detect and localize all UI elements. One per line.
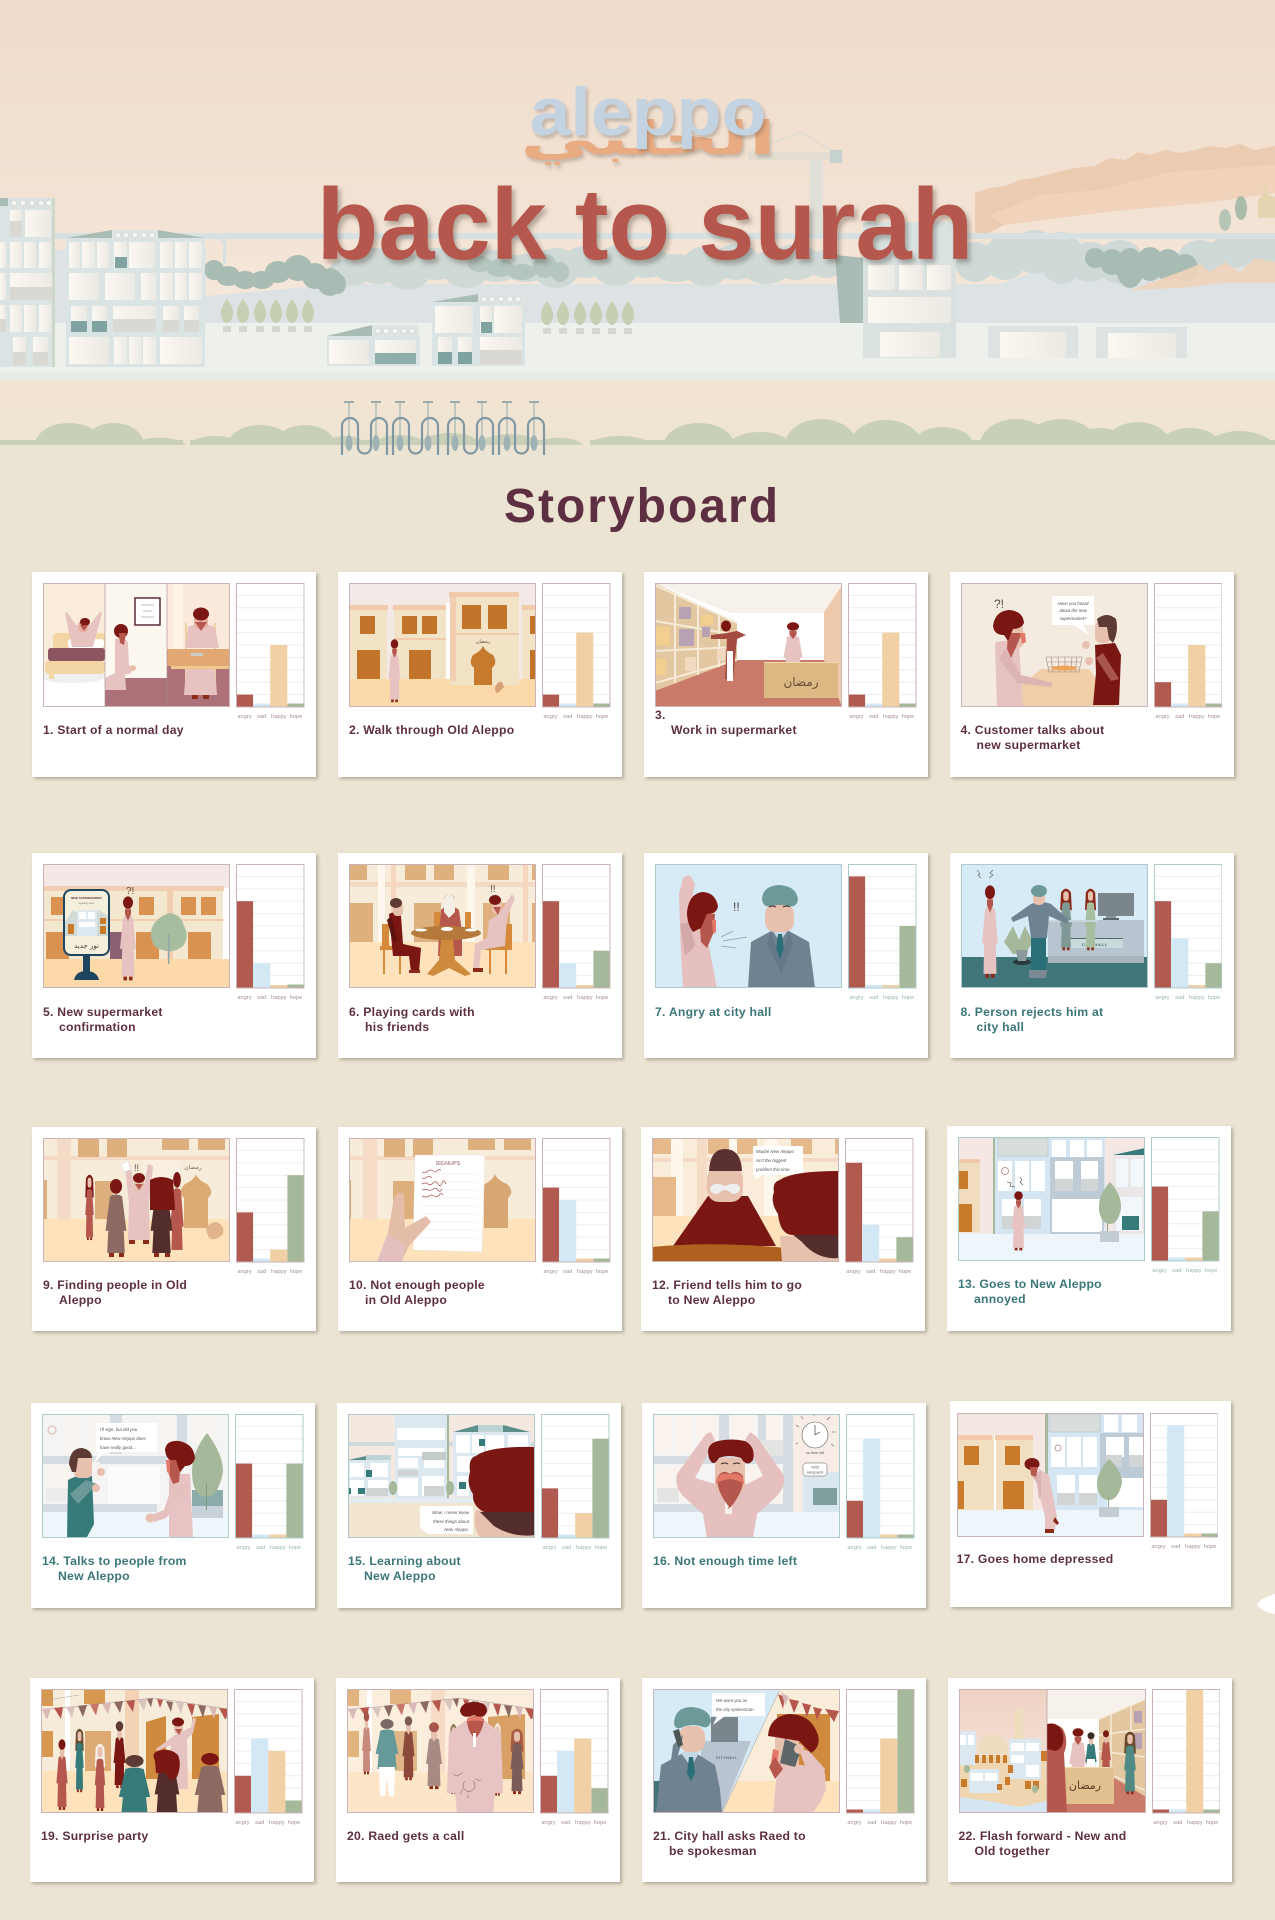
- scene 15: learning about New Aleppo: New Aleppo.: [444, 1527, 469, 1532]
- scene 2: walk through Old Aleppo: رمضان: [476, 639, 491, 645]
- scene 16: not enough time left: [653, 1414, 840, 1538]
- scene 15: learning about New Aleppo: [348, 1414, 535, 1538]
- emotion chart 5: [236, 864, 304, 1001]
- emotion chart 22: angry: [1153, 1820, 1167, 1826]
- emotion chart 14: happy: [270, 1545, 286, 1551]
- emotion chart 5: sad: [257, 995, 266, 1001]
- emotion chart 16: angry: [847, 1545, 862, 1551]
- mid-ground haze: [206, 262, 1275, 325]
- emotion chart 5: angry: [237, 995, 252, 1001]
- emotion chart 15: sad: [562, 1545, 571, 1551]
- scene 9: finding people in Old Aleppo: [43, 1138, 230, 1262]
- emotion chart 20: [540, 1689, 608, 1829]
- emotion chart 17: happy: [1185, 1544, 1200, 1550]
- emotion chart 7: sad: [869, 995, 878, 1001]
- heading: Storyboard: Storyboard: [504, 480, 780, 533]
- caption 10: 10. Not enough people: [349, 1278, 485, 1292]
- ground strip: [0, 323, 1275, 380]
- emotion chart 13: sad: [1172, 1268, 1181, 1274]
- emotion chart 14: hope: [289, 1545, 301, 1551]
- scene 4: customer talks about new supermarket: [961, 583, 1148, 707]
- panel: card 8: [950, 853, 1234, 1058]
- tree row 1: [221, 299, 314, 332]
- scene 9: finding people in Old Aleppo: رمضان: [184, 1164, 202, 1171]
- scene 20: Raed gets a call: [347, 1689, 534, 1813]
- panel: card 19: [30, 1678, 314, 1882]
- caption 9: [43, 1278, 187, 1307]
- panel: card 6: [338, 853, 622, 1058]
- emotion chart 19: angry: [235, 1820, 250, 1826]
- emotion chart 21: hope: [900, 1820, 912, 1826]
- scene 4: customer talks about new supermarket: Have you heard: [1057, 601, 1089, 606]
- emotion chart 7: angry: [849, 995, 864, 1001]
- emotion chart 9: [236, 1138, 304, 1275]
- dark forest clump left: [204, 255, 346, 296]
- caption 9: Aleppo: [59, 1293, 102, 1307]
- scene 22: flash forward, new and old together: رمضان: [1068, 1779, 1101, 1792]
- scene 7: angry at city hall: [655, 864, 842, 988]
- scene 5: new supermarket confirmation: ?!: [126, 886, 134, 897]
- emotion chart 9: hope: [290, 1269, 302, 1275]
- emotion chart 6: angry: [543, 995, 558, 1001]
- caption 12: 12. Friend tells him to go: [652, 1278, 802, 1292]
- title: back to surah: [317, 169, 973, 281]
- panel: card 9: [32, 1127, 316, 1331]
- building D: [432, 294, 525, 366]
- scene 15: learning about New Aleppo: Wow, I never knew: [432, 1510, 470, 1515]
- emotion chart 15: angry: [542, 1545, 557, 1551]
- scene 22: flash forward, new and old together: [958, 1689, 1146, 1813]
- caption 15: 15. Learning about: [348, 1554, 461, 1568]
- emotion chart 10: happy: [577, 1269, 593, 1275]
- clock icon: 43/50: [811, 1466, 819, 1470]
- crane: [748, 132, 842, 235]
- emotion chart 8: [1154, 864, 1222, 1001]
- caption 7: 7. Angry at city hall: [655, 1005, 772, 1019]
- emotion chart 7: hope: [902, 995, 914, 1001]
- caption 14: New Aleppo: [58, 1569, 130, 1583]
- panel: card 12: [641, 1127, 925, 1331]
- emotion chart 20: hope: [594, 1820, 606, 1826]
- caption 6: [349, 1005, 475, 1034]
- caption 4: [960, 723, 1104, 752]
- dark forest clump right: [1085, 247, 1198, 288]
- panel: card 14: [31, 1403, 315, 1608]
- caption 8: [960, 1005, 1103, 1034]
- emotion chart 20: angry: [541, 1820, 556, 1826]
- caption 15: New Aleppo: [364, 1569, 436, 1583]
- emotion chart 19: [234, 1689, 302, 1829]
- caption 16: 16. Not enough time left: [653, 1554, 797, 1568]
- scene 2: walk through Old Aleppo: [349, 583, 536, 707]
- emotion chart 12: hope: [899, 1269, 911, 1275]
- clock icon: no time left: [806, 1451, 825, 1455]
- panel: card 3: [644, 572, 928, 777]
- scene 13: goes to New Aleppo annoyed: [958, 1137, 1145, 1261]
- emotion chart 3: [848, 583, 916, 720]
- caption 14: [42, 1554, 187, 1583]
- caption 3: 3.: [655, 708, 666, 722]
- emotion chart 13: happy: [1186, 1268, 1202, 1274]
- panel: card 1: [32, 572, 316, 777]
- emotion chart 8: angry: [1155, 995, 1169, 1001]
- orange slope right: [1130, 258, 1275, 290]
- clock icon: autographs: [807, 1471, 824, 1475]
- scene 5: new supermarket confirmation: نور جديد: [74, 942, 99, 950]
- emotion chart 12: [845, 1138, 914, 1275]
- emotion chart 19: happy: [269, 1820, 285, 1826]
- scene 19: surprise party: [41, 1689, 228, 1813]
- emotion chart 10: [542, 1138, 610, 1275]
- caption 8: city hall: [976, 1020, 1024, 1034]
- emotion chart 3: sad: [869, 714, 878, 720]
- scene 6: playing cards with friends: !!: [490, 884, 496, 895]
- panel: card 2: [338, 572, 622, 777]
- logo: aleppo blue letters: aleppo: [530, 74, 766, 150]
- scene 21: city hall asks Raed to be spokesman: [653, 1689, 840, 1813]
- emotion chart 3: hope: [902, 714, 914, 720]
- caption 6: his friends: [365, 1020, 429, 1034]
- emotion chart 9: angry: [237, 1269, 252, 1275]
- caption 21: 21. City hall asks Raed to: [653, 1829, 806, 1843]
- scene 14: talks to people from New Aleppo: know New Aleppo does: [100, 1436, 147, 1441]
- emotion chart 1: [236, 583, 304, 720]
- scene 4: customer talks about new supermarket: supermarket?: [1059, 616, 1086, 621]
- emotion chart 21: sad: [867, 1820, 876, 1826]
- emotion chart 17: hope: [1203, 1544, 1216, 1550]
- scene 21: city hall asks Raed to be spokesman: CITYHALL: [716, 1756, 738, 1760]
- emotion chart 17: [1150, 1413, 1218, 1553]
- caption 4: 4. Customer talks about: [960, 723, 1104, 737]
- caption 3: Work in supermarket: [671, 723, 797, 737]
- caption 12: to New Aleppo: [668, 1293, 755, 1307]
- distant orange hills: [975, 144, 1275, 240]
- dark forest clump centre: [468, 254, 569, 282]
- emotion chart 10: sad: [563, 1269, 572, 1275]
- emotion chart 20: happy: [575, 1820, 591, 1826]
- emotion chart 21: [846, 1689, 914, 1829]
- emotion chart 6: sad: [563, 995, 572, 1001]
- caption 15: [348, 1554, 461, 1584]
- emotion chart 19: sad: [255, 1820, 264, 1826]
- forest mid tone: [328, 244, 844, 290]
- caption 4: new supermarket: [976, 738, 1080, 752]
- caption 5: 5. New supermarket: [43, 1005, 163, 1019]
- scene 7: angry at city hall: !!: [733, 900, 740, 914]
- caption 13: 13. Goes to New Aleppo: [958, 1277, 1102, 1291]
- emotion chart 4: [1154, 583, 1222, 720]
- emotion chart 4: sad: [1175, 714, 1184, 720]
- emotion chart 10: angry: [543, 1269, 558, 1275]
- emotion chart 1: hope: [290, 714, 302, 720]
- caption 5: [43, 1005, 163, 1034]
- building C: [327, 325, 420, 366]
- scene 6: playing cards with friends: [349, 864, 536, 988]
- old town castle on the far right: [1219, 183, 1275, 231]
- emotion chart 2: hope: [596, 714, 608, 720]
- emotion chart 17: angry: [1151, 1544, 1165, 1550]
- scene 15: learning about New Aleppo: these things about: [433, 1519, 470, 1524]
- emotion chart 3: angry: [849, 714, 864, 720]
- scene 8: person rejects him at city hall: [961, 864, 1148, 988]
- caption 8: 8. Person rejects him at: [960, 1005, 1103, 1019]
- decorative white blob at right edge: [1257, 1594, 1275, 1614]
- emotion chart 7: [848, 864, 916, 1001]
- teal tower side: [835, 255, 865, 323]
- emotion chart 14: [235, 1414, 304, 1551]
- emotion chart 15: hope: [595, 1545, 607, 1551]
- scene 17: goes home depressed: [957, 1413, 1144, 1537]
- panel: card 16: [642, 1403, 926, 1608]
- building B: [66, 230, 205, 367]
- caption 17: 17. Goes home depressed: [957, 1552, 1113, 1566]
- emotion chart 8: sad: [1175, 995, 1184, 1001]
- scene 10: not enough people in Old Aleppo: [349, 1138, 536, 1262]
- emotion chart 14: sad: [256, 1545, 265, 1551]
- caption 5: confirmation: [59, 1020, 136, 1034]
- emotion chart 14: angry: [236, 1545, 251, 1551]
- scene 3: work in supermarket: [655, 583, 842, 707]
- panel: card 4: [950, 572, 1234, 777]
- caption 1: 1. Start of a normal day: [43, 723, 184, 737]
- scene 21: city hall asks Raed to be spokesman: We want you as: [716, 1698, 748, 1703]
- caption 22: Old together: [974, 1844, 1050, 1858]
- scene 21: city hall asks Raed to be spokesman: the city spokesman.: [716, 1707, 755, 1712]
- scene 4: customer talks about new supermarket: about the new: [1059, 608, 1087, 613]
- emotion chart 22: sad: [1173, 1820, 1182, 1826]
- scene 8: person rejects him at city hall: CITYHALL: [1081, 942, 1108, 947]
- bushes: [0, 419, 1275, 445]
- emotion chart 6: happy: [577, 995, 593, 1001]
- emotion chart 8: hope: [1207, 995, 1220, 1001]
- emotion chart 9: sad: [257, 1269, 266, 1275]
- bridge: [0, 233, 1275, 264]
- panel: card 15: [337, 1403, 621, 1608]
- emotion chart 20: sad: [561, 1820, 570, 1826]
- panel: card 22: [948, 1678, 1232, 1882]
- scene 3: work in supermarket: رمضان: [783, 675, 819, 690]
- emotion chart 7: happy: [883, 995, 899, 1001]
- emotion chart 8: happy: [1189, 995, 1204, 1001]
- caption 19: 19. Surprise party: [41, 1829, 148, 1843]
- emotion chart 21: happy: [881, 1820, 897, 1826]
- emotion chart 13: hope: [1205, 1268, 1217, 1274]
- panel: card 13: [947, 1126, 1231, 1331]
- emotion chart 22: hope: [1205, 1820, 1218, 1826]
- emotion chart 4: angry: [1155, 714, 1169, 720]
- emotion chart 15: happy: [576, 1545, 592, 1551]
- forest right mid tone: [955, 230, 1275, 284]
- emotion chart 16: [846, 1414, 914, 1554]
- emotion chart 2: [542, 583, 610, 720]
- caption 12: [652, 1278, 802, 1307]
- emotion chart 15: [541, 1414, 610, 1551]
- caption 21: [653, 1829, 806, 1859]
- emotion chart 6: [542, 864, 610, 1001]
- caption 3: [655, 708, 797, 737]
- emotion chart 21: angry: [847, 1820, 862, 1826]
- emotion chart 12: happy: [880, 1269, 896, 1275]
- clock icon: [796, 1414, 836, 1476]
- scene 12: friend tells him to go to New Aleppo: isn't the biggest: [756, 1158, 787, 1163]
- emotion chart 10: hope: [596, 1269, 608, 1275]
- scene 12: friend tells him to go to New Aleppo: problem this time.: [755, 1167, 791, 1172]
- emotion chart 22: happy: [1187, 1820, 1202, 1826]
- scene 12: friend tells him to go to New Aleppo: Maybe New Aleppo: [756, 1149, 794, 1154]
- tree row 2: [541, 301, 634, 334]
- emotion chart 22: [1152, 1689, 1220, 1829]
- emotion chart 1: angry: [237, 714, 252, 720]
- scene 12: friend tells him to go to New Aleppo: [652, 1138, 839, 1262]
- caption 20: 20. Raed gets a call: [347, 1829, 464, 1843]
- caption 2: 2. Walk through Old Aleppo: [349, 723, 514, 737]
- emotion chart 4: hope: [1207, 714, 1220, 720]
- caption 14: 14. Talks to people from: [42, 1554, 187, 1568]
- emotion chart 5: happy: [271, 995, 287, 1001]
- bike rack sculpture: [342, 402, 544, 455]
- building A: [0, 198, 55, 367]
- emotion chart 5: hope: [290, 995, 302, 1001]
- emotion chart 3: happy: [883, 714, 899, 720]
- scene 9: finding people in Old Aleppo: !!: [134, 1163, 139, 1173]
- emotion chart 2: happy: [577, 714, 593, 720]
- caption 13: annoyed: [974, 1292, 1026, 1306]
- header illustration: Aleppo skyline: [0, 0, 1275, 455]
- caption 10: in Old Aleppo: [365, 1293, 447, 1307]
- panel: card 5: [32, 853, 316, 1058]
- emotion chart 16: happy: [881, 1545, 897, 1551]
- scene 5: new supermarket confirmation: NEW SUPERMARKET: [71, 896, 102, 900]
- lower strip: [0, 380, 1275, 446]
- emotion chart 13: [1151, 1137, 1220, 1274]
- caption 13: [958, 1277, 1102, 1306]
- panel: card 7: [644, 853, 928, 1058]
- emotion chart 4: happy: [1189, 714, 1204, 720]
- building E: [863, 222, 956, 358]
- panel: card 20: [336, 1678, 620, 1882]
- caption 22: 22. Flash forward - New and: [958, 1829, 1126, 1843]
- emotion chart 6: hope: [596, 995, 608, 1001]
- emotion chart 2: sad: [563, 714, 572, 720]
- emotion chart 2: angry: [543, 714, 558, 720]
- panel: card 17: [950, 1401, 1231, 1607]
- emotion chart 1: happy: [271, 714, 287, 720]
- building F and G: [988, 326, 1187, 358]
- emotion chart 9: happy: [271, 1269, 287, 1275]
- scene 14: talks to people from New Aleppo: I'll sign, but did you: [100, 1427, 138, 1432]
- panel: card 10: [338, 1127, 622, 1331]
- scene 5: new supermarket confirmation: [43, 864, 230, 988]
- emotion chart 19: hope: [288, 1820, 300, 1826]
- caption 21: be spokesman: [669, 1844, 757, 1858]
- emotion chart 12: angry: [846, 1269, 861, 1275]
- emotion chart 12: sad: [866, 1269, 875, 1275]
- logo: Arabic orange letters: الحلبي: [520, 111, 776, 165]
- scene 5: new supermarket confirmation: opening soon: [79, 901, 95, 905]
- caption 6: 6. Playing cards with: [349, 1005, 475, 1019]
- caption 9: 9. Finding people in Old: [43, 1278, 187, 1292]
- scene 4: customer talks about new supermarket: ?!: [994, 597, 1004, 611]
- scene 14: talks to people from New Aleppo: have really good...: [100, 1445, 136, 1450]
- panel: card 21: [642, 1678, 926, 1882]
- caption 10: [349, 1278, 485, 1307]
- scene 14: talks to people from New Aleppo: [42, 1414, 229, 1538]
- scene 1: start of a normal day: [43, 583, 230, 707]
- scene 10: not enough people in Old Aleppo: SIGNUPS: [436, 1161, 461, 1167]
- emotion chart 17: sad: [1171, 1544, 1180, 1550]
- emotion chart 16: hope: [900, 1545, 912, 1551]
- emotion chart 16: sad: [867, 1545, 876, 1551]
- caption 22: [958, 1829, 1126, 1859]
- emotion chart 13: angry: [1152, 1268, 1167, 1274]
- emotion chart 1: sad: [257, 714, 266, 720]
